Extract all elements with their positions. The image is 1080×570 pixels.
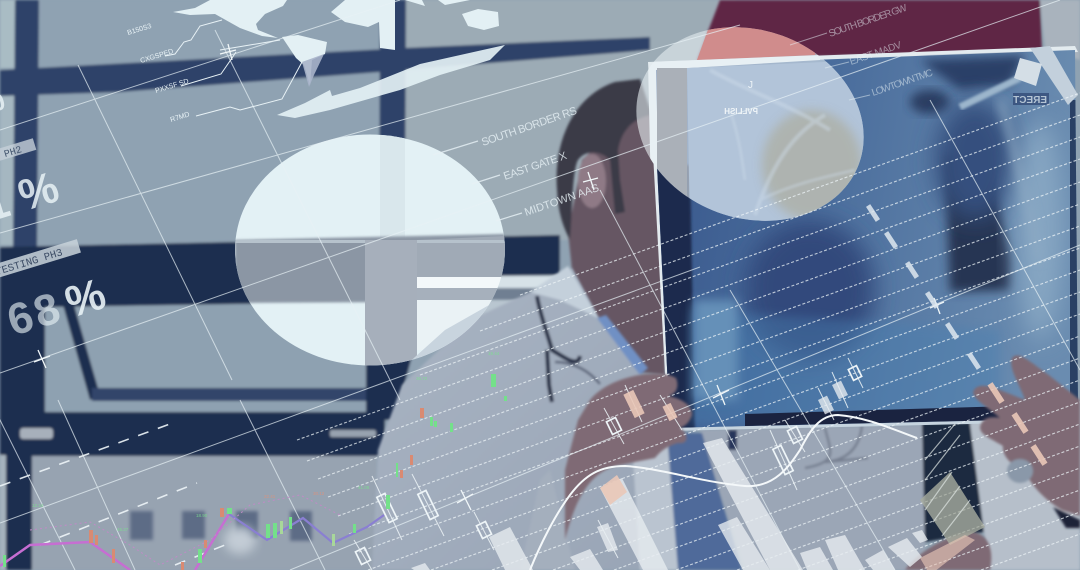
stock chart lower left	[0, 351, 507, 570]
place labels: SOUTH BORDER GW	[827, 3, 909, 40]
world map	[173, 0, 505, 118]
stethoscope	[537, 296, 600, 402]
pink trend line	[0, 542, 130, 570]
map labels and connector lines	[127, 20, 302, 124]
map labels and connector lines: CXGSPED	[140, 48, 174, 65]
green candles	[3, 374, 507, 567]
place labels: SOUTH BORDER RS	[480, 105, 579, 149]
x-ray axis dashes	[866, 204, 981, 370]
striped bar on dark stripe	[920, 424, 985, 545]
tick crosses	[34, 44, 944, 510]
testing phase 3 number: 68	[2, 284, 66, 346]
grid: dotted lines	[297, 93, 1080, 570]
map: Africa and Europe	[331, 0, 395, 50]
chart value labels: 18.90	[196, 513, 208, 518]
x-ray markers: ERECT	[1013, 95, 1047, 106]
person: doctor head	[557, 79, 665, 375]
map labels and connector lines: PXXSF SD	[155, 78, 190, 95]
testing percentages	[0, 88, 111, 346]
x-ray film	[648, 46, 1080, 431]
red garment through circle	[697, 24, 815, 60]
window frame	[0, 0, 650, 250]
candlestick overlay	[354, 358, 1048, 570]
peach candles	[600, 382, 1048, 570]
map: South America	[282, 35, 327, 85]
map labels and connector lines: R7MD	[170, 111, 191, 124]
map: Asia islands	[405, 0, 470, 6]
pie chart: tilted translucent circle: J	[748, 80, 753, 91]
x-ray side marker	[1014, 58, 1042, 86]
chart value labels: 19.44	[488, 351, 500, 356]
dotted pink line	[30, 495, 340, 565]
chart value labels	[32, 351, 500, 532]
testing phase 3 tag	[0, 239, 81, 280]
place labels	[433, 3, 934, 221]
x-ray corner band	[1030, 46, 1078, 105]
chart value labels: 45.27	[117, 527, 129, 532]
grid: dashed lines	[0, 424, 225, 565]
orange candles	[89, 408, 424, 570]
hands	[565, 355, 1080, 570]
chart value labels: 36.72	[416, 376, 428, 381]
solid candles and bars	[411, 381, 928, 570]
map: Antarctica sliver	[277, 45, 505, 118]
chart value labels: 41.08	[358, 485, 370, 490]
map: Australia	[462, 9, 499, 30]
testing phase 2 tag	[0, 138, 37, 167]
person: red garment behind x-ray	[697, 0, 1080, 60]
place labels: EAST GATE X	[502, 150, 569, 183]
chart value labels: 22.41	[264, 494, 276, 499]
film marker text: PVLLISH	[724, 107, 758, 116]
pie chart: tilted translucent circle	[636, 27, 864, 221]
purple trend line	[229, 514, 384, 543]
chart value labels: 12.34	[32, 503, 44, 508]
map labels and connector lines: B150S3	[127, 23, 153, 37]
hollow candles	[355, 366, 862, 564]
testing phase 3 percent sign: %	[60, 269, 111, 328]
place labels: EAST MADV	[848, 40, 903, 68]
film border through circle	[648, 55, 820, 170]
blurred distant windows	[130, 511, 312, 541]
place labels: LOWTOWN TMC	[870, 68, 934, 99]
white trend curve	[530, 415, 917, 570]
chart value labels: 30.12	[313, 491, 325, 496]
bone shapes	[710, 70, 855, 215]
candle wicks	[354, 358, 863, 570]
map: North America	[173, 0, 287, 38]
place labels: MIDTOWN AAS	[523, 182, 601, 219]
pie chart: large circle	[235, 134, 507, 370]
person: white coat	[372, 266, 1080, 570]
